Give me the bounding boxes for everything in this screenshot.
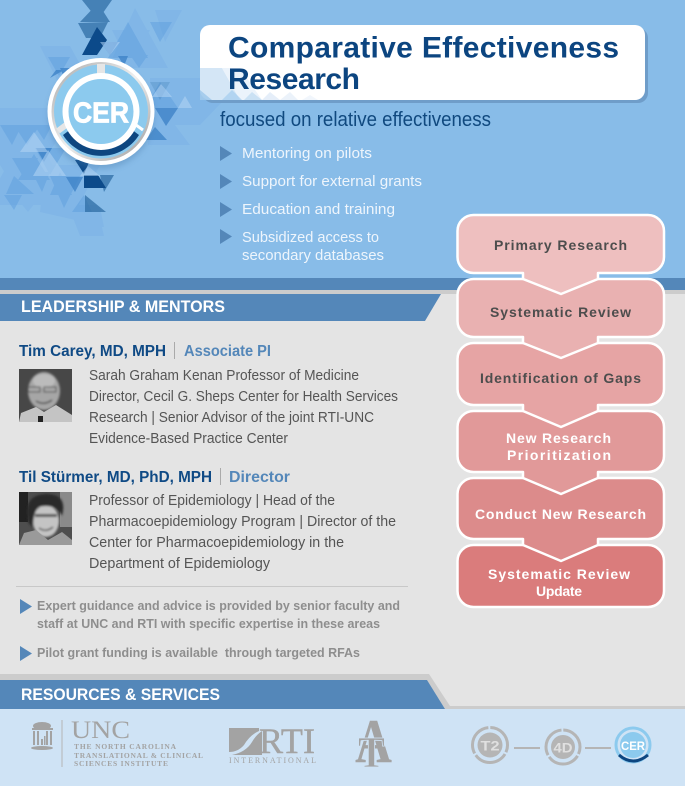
step 4: Prioritization [507, 447, 611, 463]
mentor: Til Sturmer [19, 468, 396, 572]
title box shadow [203, 28, 648, 103]
teal dark layer [78, 0, 170, 212]
icon: 4D [546, 730, 580, 764]
institute name: TRANSLATIONAL & CLINICAL [74, 751, 203, 760]
step 5 [458, 478, 664, 561]
bullet: grants: Support for external grants [242, 173, 422, 190]
header background [0, 0, 685, 279]
title box fade pattern [200, 68, 318, 100]
icon: old well [31, 722, 53, 750]
logo: RTI International: RTI [259, 721, 315, 761]
UNC wordmark: UNC [71, 717, 130, 744]
footer background [0, 709, 685, 786]
biography [89, 368, 398, 447]
note: expert guidance [20, 598, 400, 631]
main grey background [0, 290, 685, 710]
bullet: mentoring: Mentoring on pilots [242, 145, 372, 162]
biography: Center for Pharmacoepidemiology in the [89, 535, 344, 551]
name line: Associate PI [184, 343, 271, 360]
icon: CER small: CER [621, 741, 646, 753]
mid layer [0, 22, 178, 212]
institute name: THE NORTH CAROLINA [74, 742, 177, 751]
subtitle: focused on relative effectiveness [220, 109, 491, 131]
biography: Pharmacoepidemiology Program | Director of the [89, 514, 396, 530]
biography: Department of Epidemiology [89, 556, 271, 572]
icon: CER small [616, 728, 650, 762]
bullet: education: Education and training [242, 201, 395, 218]
step 6: Systematic Review [488, 566, 630, 582]
title text [228, 32, 619, 96]
bullet: databases: secondary databases [242, 247, 384, 264]
step 5: Conduct New Research [475, 506, 646, 522]
biography: Evidence-Based Practice Center [89, 431, 288, 447]
process flow [458, 215, 664, 607]
icon: 4D: 4D [554, 740, 572, 756]
biography: Sarah Graham Kenan Professor of Medicine [89, 368, 359, 384]
mentor: Tim Carey [19, 342, 398, 447]
step 6 [458, 545, 664, 607]
name line [19, 342, 271, 360]
step 4 [458, 411, 664, 494]
benefits list [220, 145, 422, 264]
logo: A and T: T [358, 728, 385, 777]
leadership heading banner [0, 294, 441, 321]
biography: Professor of Epidemiology | Head of the [89, 493, 335, 509]
biography: Director, Cecil G. Sheps Center for Health Services [89, 389, 398, 405]
step 1 [458, 215, 664, 294]
title box [200, 25, 648, 103]
strong blue layer [36, 42, 178, 192]
step 4: New Research [506, 430, 611, 446]
note: expert guidance: Expert guidance and advice is provided by senior faculty and [37, 598, 400, 613]
CER logo [48, 58, 154, 169]
institute name: SCIENCES INSTITUTE [74, 759, 168, 768]
leadership heading banner: LEADERSHIP & MENTORS [21, 298, 225, 316]
logo: UNC TraCS [31, 717, 203, 768]
title text: Research [228, 63, 360, 96]
step 3: Identification of Gaps [480, 370, 641, 386]
resources heading banner [0, 674, 685, 709]
pale layer [0, 8, 245, 236]
navy layer [75, 27, 107, 188]
logo: RTI International [229, 721, 316, 765]
icon: T2: T2 [480, 738, 500, 754]
biography [89, 493, 396, 572]
title text: Comparative Effectiveness [228, 32, 619, 64]
title box panel [200, 25, 645, 100]
name line: Tim Carey, MD, MPH [19, 343, 166, 360]
triangle star pattern [0, 0, 245, 236]
progress icons [472, 727, 650, 764]
logo: RTI International: INTERNATIONAL [229, 756, 316, 765]
step 3 [458, 343, 664, 427]
logo: A and T: A [355, 708, 392, 776]
light highlight layer [20, 42, 192, 176]
CER text: CER [73, 98, 129, 130]
note: expert guidance: staff at UNC and RTI with specific expertise in these areas [37, 616, 380, 631]
name line: Til Stürmer, MD, PhD, MPH [19, 469, 212, 486]
bullet: databases [220, 229, 384, 264]
note: pilot funding: Pilot grant funding is available through targeted RFAs [37, 645, 360, 660]
resources heading banner: RESOURCES & SERVICES [21, 686, 220, 704]
header bottom band [0, 278, 685, 294]
bullet: databases: Subsidized access to [242, 229, 379, 246]
biography: Research | Senior Advisor of the joint RTI-UNC [89, 410, 374, 426]
step 6: Update [536, 583, 582, 599]
step 1: Primary Research [494, 237, 627, 253]
institute name [74, 742, 203, 768]
portrait [19, 369, 72, 422]
icon: T2 [472, 727, 508, 763]
portrait [19, 492, 72, 545]
step 2: Systematic Review [490, 304, 631, 320]
step 2 [458, 279, 664, 358]
name line: Director [229, 469, 290, 486]
